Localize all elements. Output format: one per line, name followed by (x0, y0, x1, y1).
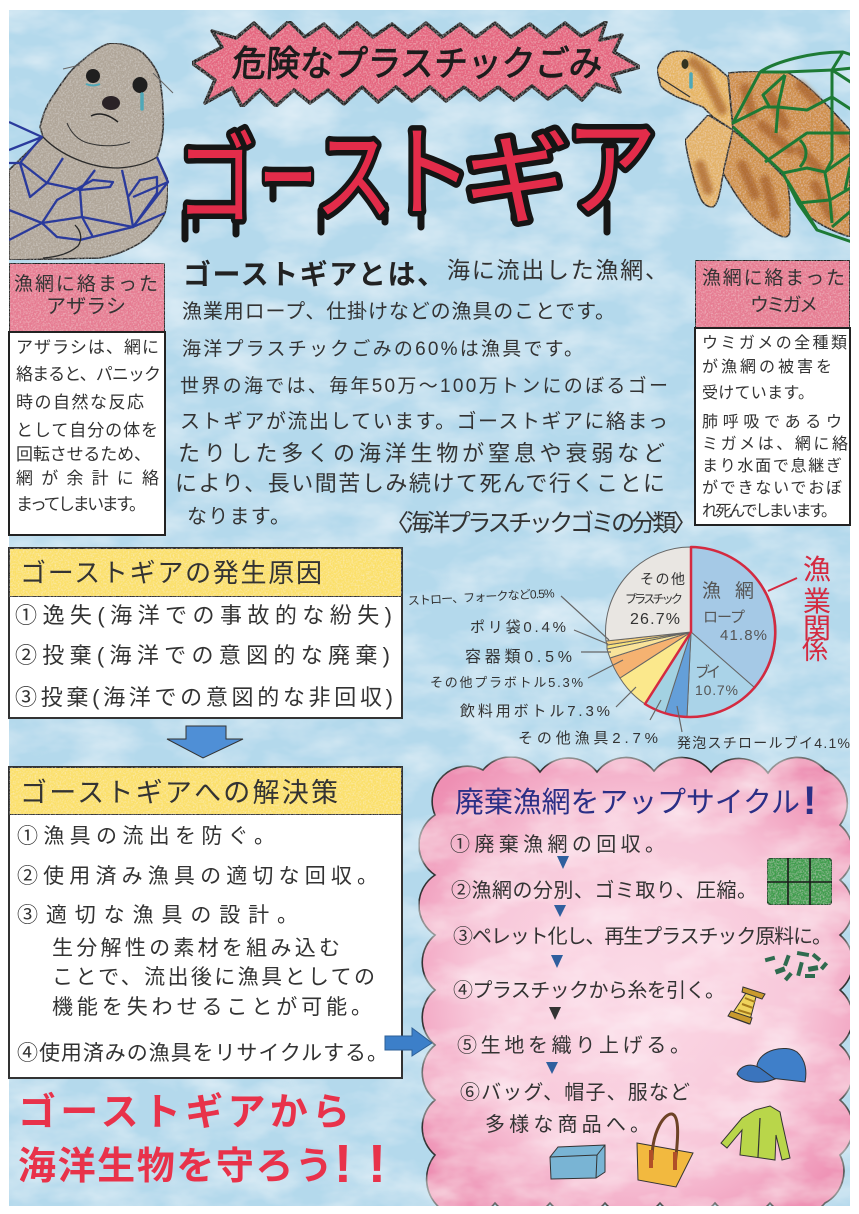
pie slice labels: その他漁具2.7% (518, 730, 658, 747)
text block: turtle explanation: 受けています。 (702, 384, 814, 402)
text block: what is ghost gear: 海に流出した漁網、 (447, 257, 668, 283)
slogan: protect marine life: ゴーストギアから (18, 1092, 350, 1134)
icon: crying sea turtle tangled in green net (657, 51, 852, 242)
annotation: fishery related: 漁 (803, 554, 831, 585)
slogan: protect marine life: 海洋生物を守ろう (18, 1146, 333, 1188)
solutions list: ③適切な漁具の設計。 (17, 904, 298, 927)
upcycle steps: ③ペレット化し、再生プラスチック原料に。 (453, 925, 832, 948)
title: ghost gear: ト (383, 118, 473, 230)
text block: what is ghost gear: 漁業用ロープ、仕掛けなどの漁具のことです。 (182, 300, 615, 323)
scalloped pink cloud (419, 757, 853, 1214)
text block: what is ghost gear: 世界の海では、毎年50万〜100万トンにのぼるゴー (180, 375, 668, 397)
heading: upcycle: ! (803, 779, 816, 823)
annotation: fishery related: 業 (803, 586, 831, 617)
text block: what is ghost gear: ゴーストギアとは、 (183, 258, 445, 290)
pie slice labels: 漁網 (702, 580, 754, 602)
title: ghost gear: ー (259, 125, 317, 237)
title: ghost gear: ギ (462, 125, 570, 237)
text block: seal explanation (9, 332, 165, 535)
text block: seal explanation: まってしまいます。 (16, 495, 146, 514)
text block: turtle explanation (695, 328, 850, 525)
pie slice labels: 飲料用ボトル7.3% (460, 703, 610, 720)
slogan: protect marine life: !! (334, 1134, 386, 1194)
slogan: protect marine life (18, 1092, 386, 1194)
heading: seal panel: 漁網に絡まった (14, 273, 158, 295)
text block: turtle explanation: が漁網の被害を (702, 358, 832, 376)
pie slice labels: 10.7% (695, 682, 738, 698)
heading: causes (9, 548, 402, 597)
solutions list: ①漁具の流出を防ぐ。 (17, 825, 275, 848)
banner: dangerous plastic waste: 危険なプラスチックごみ (231, 43, 604, 84)
causes list: ①逸失(海洋での事故的な紛失) (15, 603, 392, 628)
text block: what is ghost gear (175, 257, 668, 528)
text block: seal explanation: 絡まると、パニック (16, 365, 161, 384)
title: ghost gear: ス (315, 122, 393, 234)
heading: causes: ゴーストギアの発生原因 (20, 558, 322, 588)
panel: solutions (9, 767, 402, 1078)
pie slice labels: その他 (640, 571, 685, 587)
chart: pie of marine plastic waste (407, 547, 850, 751)
pie slice labels: 容器類0.5% (465, 648, 572, 666)
text block: what is ghost gear: なります。 (187, 506, 290, 528)
panel: upcycling waste nets (419, 757, 853, 1214)
title: ghost gear: ア (565, 109, 657, 230)
heading: upcycle (455, 779, 816, 823)
pie slice labels: ブイ (695, 663, 721, 681)
solutions list: ②使用済み漁具の適切な回収。 (17, 865, 378, 888)
panel: causes (9, 548, 402, 718)
pie slice labels: その他プラボトル5.3% (430, 675, 583, 690)
causes list: ③投棄(海洋での意図的な非回収) (15, 685, 393, 710)
upcycle steps: 多様な商品へ。 (485, 1113, 650, 1136)
text block: turtle explanation: 肺呼吸であるウ (702, 413, 842, 431)
text block: seal explanation: 網が余計に絡 (16, 469, 159, 488)
text block: turtle explanation: ミガメは、網に絡 (702, 435, 848, 453)
solutions list: 生分解性の素材を組み込む (52, 937, 340, 960)
upcycle steps (450, 833, 832, 1136)
icon: yellow tote bag (637, 1114, 693, 1187)
red outline: fishery related (645, 547, 775, 717)
brown shading (693, 62, 845, 215)
pie slice labels: ストロー、フォークなど0.5% (407, 586, 555, 608)
solutions list: ④使用済みの漁具をリサイクルする。 (17, 1042, 388, 1065)
pie slice labels (407, 571, 850, 751)
upcycle steps: ①廃棄漁網の回収。 (450, 833, 665, 856)
text block: turtle explanation: ウミガメの全種類 (702, 334, 847, 352)
icon: thread spool (728, 987, 765, 1024)
icon: blue cap (737, 1048, 806, 1082)
icon: compressed net block (767, 858, 832, 905)
text block: what is ghost gear: ストギアが流出しています。ゴーストギアに絡まっ (180, 410, 668, 433)
heading: solutions: ゴーストギアへの解決策 (20, 778, 338, 808)
heading: turtle panel: 漁網に絡まった (702, 267, 845, 289)
text block: what is ghost gear: 海洋プラスチックごみの60%は漁具です。 (182, 338, 583, 360)
icon: plastic pellets (765, 951, 828, 981)
pie slices (606, 547, 776, 717)
solutions list: ことで、流出後に漁具としての (52, 966, 375, 989)
text block: turtle explanation: れ死んでしまいます。 (702, 502, 837, 520)
panel: seal (9, 263, 165, 535)
upcycle steps: ⑤生地を織り上げる。 (457, 1034, 690, 1057)
icon: crying seal tangled in net (9, 43, 173, 260)
heading: seal panel: アザラシ (46, 296, 126, 318)
text block: turtle explanation: ができないでおぼ (702, 479, 842, 497)
upcycle steps: ⑥バッグ、帽子、服など (460, 1081, 690, 1104)
causes list (15, 603, 393, 710)
text block: turtle explanation: まり水面で息継ぎ (702, 457, 842, 475)
title: ghost gear (176, 109, 657, 239)
icon: blue box bag (550, 1145, 605, 1179)
arrow: recycling to upcycle (385, 1028, 432, 1056)
heading: marine plastic classification: 〈海洋プラスチックゴミの分類〉 (385, 510, 697, 537)
pie slice labels: ポリ袋0.4% (470, 619, 566, 636)
annotation: fishery related: 関 (803, 613, 831, 644)
annotation: fishery related: 係 (802, 635, 828, 665)
text block: seal explanation: として自分の体を (16, 421, 158, 440)
upcycle steps: ④プラスチックから糸を引く。 (453, 979, 725, 1002)
solutions list: 機能を失わせることが可能。 (52, 996, 372, 1019)
heading: seal panel (9, 263, 165, 332)
heading: turtle panel: ウミガメ (750, 294, 818, 316)
text block: seal explanation: アザラシは、網に (16, 338, 159, 357)
text block: what is ghost gear: により、長い間苦しみ続けて死んで行くことに (175, 471, 665, 496)
banner: dangerous plastic waste (192, 21, 640, 107)
pie slice labels: プラスチック (625, 592, 683, 606)
title: ghost gear: ゴ (176, 125, 256, 237)
pie slice labels: 26.7% (630, 611, 680, 628)
step arrows (546, 856, 569, 1074)
arrow: causes to solutions (167, 726, 243, 758)
pie slice labels: ロープ (703, 609, 745, 626)
upcycle steps: ②漁網の分別、ゴミ取り、圧縮。 (451, 879, 757, 902)
heading: upcycle: 廃棄漁網をアップサイクル (455, 786, 800, 819)
text block: what is ghost gear: たりした多くの海洋生物が窒息や衰弱など (178, 441, 665, 466)
heading: turtle panel (695, 260, 850, 328)
pie slice labels: 41.8% (720, 627, 767, 644)
solutions list (17, 825, 388, 1065)
causes list: ②投棄(海洋での意図的な廃棄) (15, 643, 390, 668)
leader lines (561, 596, 682, 732)
heading: solutions (9, 767, 402, 815)
annotation: fishery related (768, 554, 831, 665)
text block: seal explanation: 回転させるため、 (16, 445, 151, 464)
text block: seal explanation: 時の自然な反応 (16, 393, 144, 412)
pie slice labels: 発泡スチロールブイ4.1% (677, 735, 850, 751)
icon: green jacket (721, 1106, 790, 1160)
panel: sea turtle (695, 260, 850, 525)
